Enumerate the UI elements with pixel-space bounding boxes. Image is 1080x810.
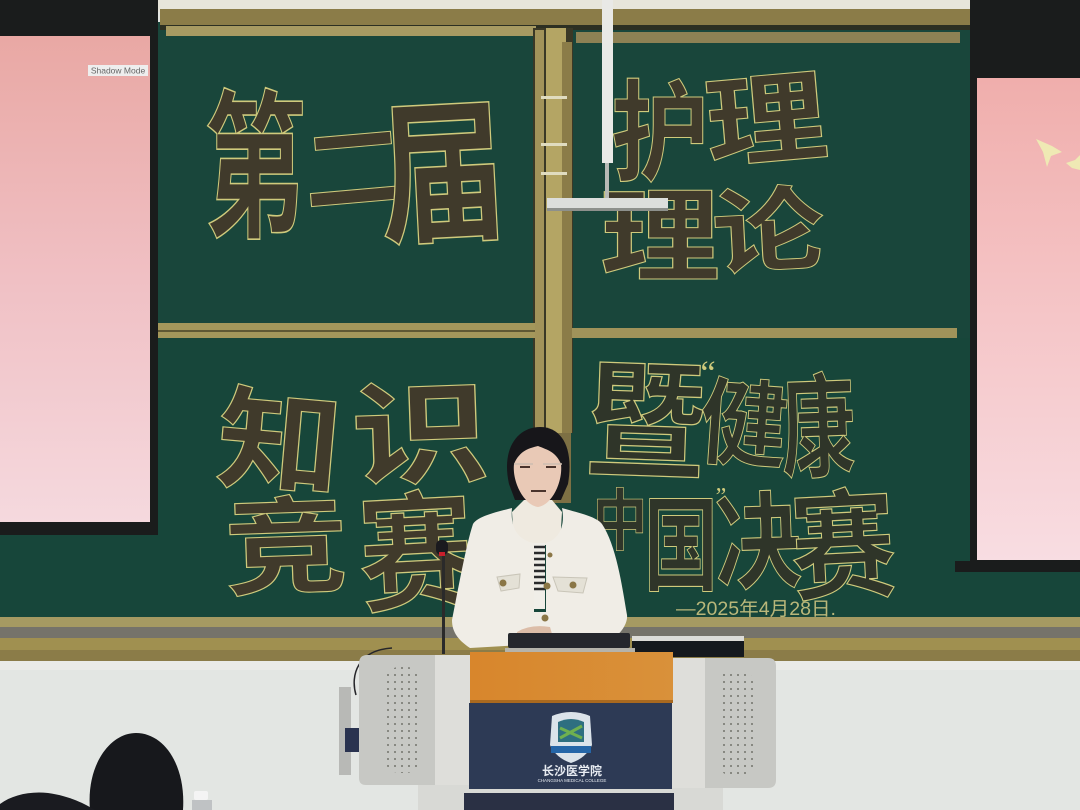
blackboard [0,9,1080,623]
college crest [550,712,592,763]
lectern wooden top [470,652,673,703]
board title: 第二届: 第 [204,82,306,259]
board title: 暨 “健康中国” 决赛: 决 [713,484,803,604]
board title: 护理 理论: 护 [611,74,709,196]
left projector screen: Shadow Mode [91,66,145,76]
audience head left [0,792,95,810]
lectern [339,648,776,810]
laptop on lectern [505,633,744,657]
lower wall [0,661,1080,810]
striped shirt [534,543,545,609]
lectern left wing [359,655,470,785]
hands [517,626,552,634]
board title: 第二届: 届 [375,85,510,265]
board middle rail left [158,323,535,338]
lectern right wing [672,658,776,788]
neck and inner top [512,500,562,545]
board title: 暨 “健康中国” 决赛: 赛 [787,479,899,617]
face [514,446,561,507]
chalk tray rail [0,617,1080,661]
board title: 知识 竞赛: 识 [349,371,491,501]
board title: 护理 理论: 理 [701,60,832,183]
wall top [0,0,1080,12]
board title: 暨 “健康中国” 决赛: 国 [644,490,718,605]
board title: 暨 “健康中国” 决赛: 中 [593,484,647,559]
right speaker grille [718,670,754,776]
microphone [436,540,448,654]
lectern base [418,783,723,810]
eyes and mouth [520,467,556,491]
college name: CHANGSHA MEDICAL COLLEGE [538,778,606,783]
jacket [452,508,627,648]
lectern left side panel [339,687,351,775]
board date: —2025年4月28日. [676,598,836,620]
board title: 暨 “健康中国” 决赛: 康 [779,366,857,494]
board title: 护理 理论 [600,60,832,295]
board title: 暨 “健康中国” 决赛: “ [700,355,716,392]
audience head [90,733,183,810]
left projector screen [0,0,158,535]
right projector screen [955,0,1080,572]
board title: 暨 “健康中国” 决赛: 健 [696,370,791,482]
board title: 第二届 [204,82,510,265]
board title: 知识 竞赛: 竞 [222,488,350,610]
board middle rail right [572,328,957,338]
presenter [452,427,627,648]
post reflections [541,96,567,175]
hair [507,427,570,500]
board title: 知识 竞赛: 赛 [355,481,477,630]
board title: 护理 理论: 理 [600,180,720,295]
board title: 暨 “健康中国” 决赛: 暨 [583,351,708,495]
board frame top [160,9,970,25]
ceiling projector pole [547,0,668,211]
board title: 暨 “健康中国” 决赛 [583,351,899,617]
lectern navy front [469,703,672,789]
jacket buttons [500,552,576,622]
board title: 护理 理论: 论 [710,177,827,287]
water bottle [192,791,212,810]
board title: 知识 竞赛 [212,371,491,630]
glasses [514,463,562,465]
college name [538,763,606,783]
left speaker grille [385,667,421,773]
college name: 长沙医学院 [542,763,602,778]
board centre post [533,28,573,433]
board title: 暨 “健康中国” 决赛: ” [716,484,726,510]
board title: 第二届: 二 [298,112,412,227]
jacket pockets [497,574,587,593]
lectern cable [354,648,392,695]
board title: 知识 竞赛: 知 [212,377,347,512]
